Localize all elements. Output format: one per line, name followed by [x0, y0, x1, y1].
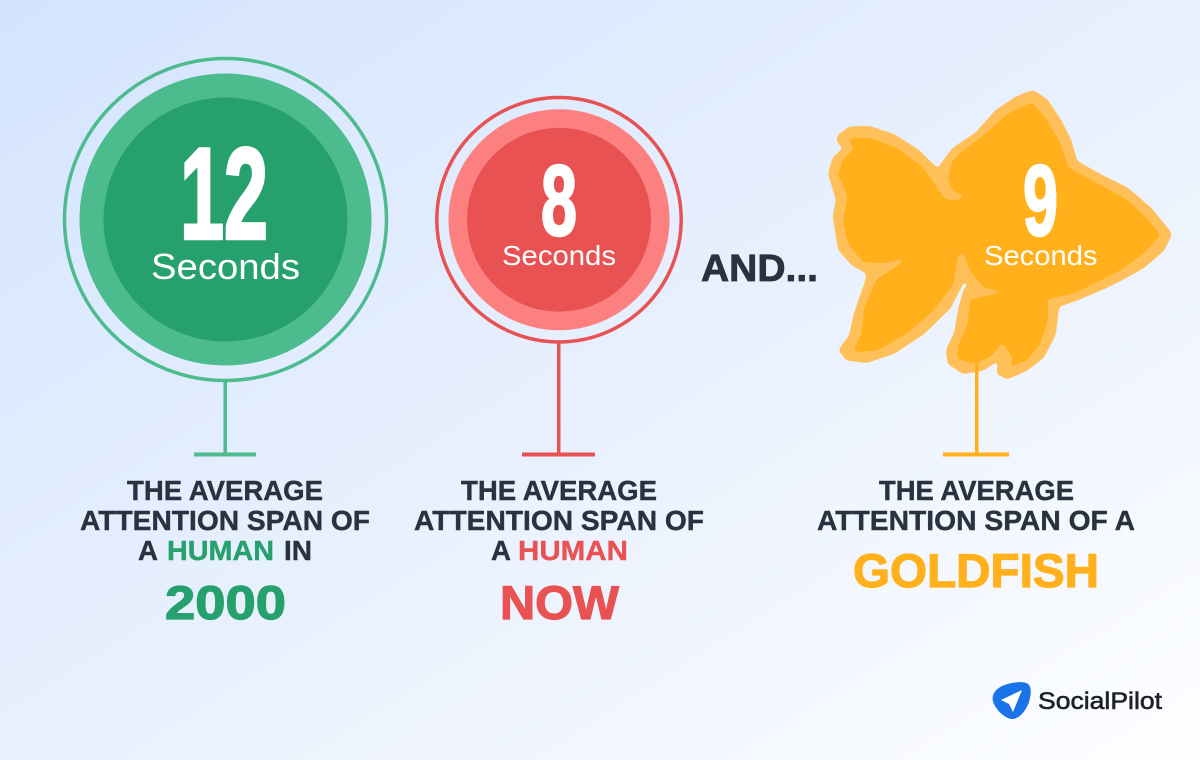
- caption: human in 2000: [80, 475, 370, 629]
- icon: paper plane badge: [993, 682, 1031, 719]
- caption: human now: HUMAN: [518, 535, 628, 566]
- number: 9: 9: [1023, 145, 1058, 257]
- caption: human in 2000: A: [138, 535, 158, 566]
- label: seconds: Seconds: [151, 246, 300, 287]
- caption: goldfish: ATTENTION SPAN OF A: [817, 505, 1135, 536]
- caption: human in 2000: THE AVERAGE: [127, 475, 323, 506]
- connector: red stem: [522, 342, 595, 456]
- caption: goldfish: [817, 475, 1135, 597]
- panel: human in 2000: [64, 58, 386, 629]
- panel: human now: [414, 98, 704, 629]
- caption: goldfish: THE AVERAGE: [879, 475, 1074, 506]
- caption: human now: NOW: [500, 576, 620, 629]
- caption: goldfish: GOLDFISH: [853, 544, 1099, 597]
- caption: human now: [414, 475, 704, 629]
- label: seconds: Seconds: [502, 240, 616, 271]
- caption: human in 2000: 2000: [165, 576, 286, 629]
- number: 8: 8: [541, 145, 577, 257]
- circle: 8 seconds: [437, 98, 681, 342]
- icon: goldfish: [830, 92, 1170, 377]
- text: and: AND...: [701, 248, 818, 290]
- wordmark: SocialPilot: [1038, 688, 1162, 715]
- caption: human in 2000: IN: [284, 535, 312, 566]
- connector: gold stem: [943, 360, 1009, 456]
- circle: 12 seconds: [64, 58, 386, 380]
- caption: human now: THE AVERAGE: [461, 475, 657, 506]
- label: seconds: Seconds: [984, 240, 1098, 271]
- logo: SocialPilot: [993, 682, 1162, 719]
- caption: human now: ATTENTION SPAN OF: [414, 505, 704, 536]
- caption: human now: A: [491, 535, 511, 566]
- caption: human in 2000: HUMAN: [167, 535, 274, 566]
- caption: human in 2000: ATTENTION SPAN OF: [80, 505, 370, 536]
- panel: goldfish: [817, 92, 1170, 597]
- number: 12: 12: [180, 120, 268, 266]
- connector: green stem: [194, 380, 256, 456]
